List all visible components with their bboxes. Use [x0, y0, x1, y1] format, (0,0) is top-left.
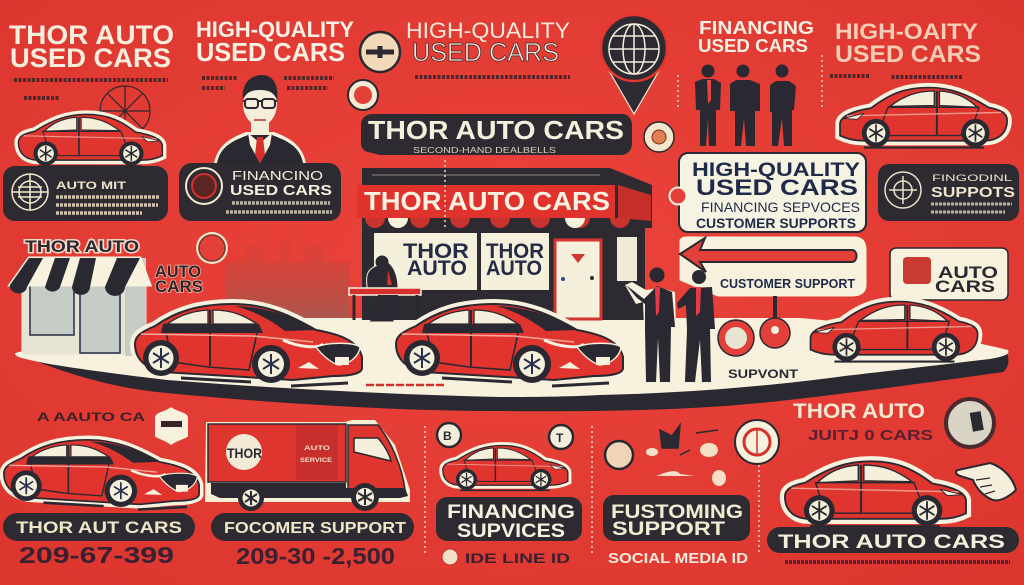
icon: pointing hand — [956, 463, 1016, 500]
icon: small badge B: B — [443, 429, 452, 443]
poster: AUTO — [304, 445, 330, 452]
man right — [677, 270, 715, 382]
decorative social icons cluster — [605, 425, 726, 486]
car: bottom right — [785, 461, 966, 526]
figure: two men shaking hands — [625, 268, 715, 382]
road — [14, 318, 1008, 411]
logo badge — [226, 434, 262, 470]
panel text — [692, 160, 860, 231]
car: bottom left — [4, 440, 199, 510]
panel heading — [931, 173, 1015, 201]
icon: small coin badge — [644, 122, 674, 152]
heading: High-Oaity Used Cars: USED CARS — [835, 41, 981, 68]
side window — [617, 237, 637, 281]
pill: Financing Supvices — [436, 497, 582, 542]
panel text: FINANCING SEPVOCES — [701, 199, 860, 215]
heading: High-Quality Used Cars outlined — [406, 18, 570, 67]
dotted separators — [425, 55, 822, 555]
storefront: Thor Auto Cars — [357, 168, 652, 320]
pill: Fustoming Support — [603, 495, 750, 541]
car: front middle center — [396, 304, 623, 386]
icon: price tag — [155, 407, 188, 445]
banner title: THOR AUTO CARS — [368, 115, 624, 145]
label: A Autoca: A AAUTO CA — [37, 410, 145, 424]
panel text: AUTO — [938, 263, 998, 282]
man 1 — [695, 64, 721, 146]
heading: Thor Auto: THOR AUTO — [793, 400, 925, 423]
panel fine print — [931, 204, 1012, 212]
panel label: CUSTOMER SUPPORT — [720, 276, 855, 291]
chassis — [211, 483, 408, 498]
man 3 — [770, 64, 796, 146]
cargo box — [208, 424, 346, 482]
target icon — [716, 318, 756, 358]
panel heading: SUPPOTS — [931, 184, 1015, 201]
store body — [362, 168, 652, 320]
panel heading — [230, 168, 332, 199]
connector and support icons — [716, 296, 790, 358]
panel text: CUSTOMER SUPPORTS — [696, 215, 856, 231]
panel fine print — [56, 197, 160, 213]
panel heading: FINGODINL — [932, 173, 1012, 183]
fine print bottom right — [785, 560, 1010, 564]
panel text: HIGH-QUALITY — [692, 160, 860, 181]
icon: clock badge — [196, 232, 228, 264]
pill: Fustoming Support: FUSTOMING — [611, 502, 743, 523]
poster — [296, 425, 338, 480]
fine print lines — [14, 76, 962, 98]
panel heading: USED CARS — [230, 182, 332, 199]
car: front middle left — [135, 304, 362, 386]
chat ring — [605, 441, 633, 469]
pill: Thor Auto Cars bottom: THOR AUTO CARS — [778, 532, 1005, 553]
man left — [625, 268, 676, 382]
icon: small badge T: T — [556, 431, 564, 445]
arrow — [680, 238, 856, 272]
panel fine print — [226, 203, 332, 212]
label: Supvont: SUPVONT — [728, 367, 799, 381]
icon: small badge T — [549, 425, 573, 449]
icon: small badge B — [437, 423, 461, 447]
car: bottom center — [443, 445, 568, 490]
store sign — [357, 185, 651, 221]
heading: Financing Used Cars: USED CARS — [698, 36, 808, 56]
shop windows — [30, 258, 146, 356]
heading: High-Quality Used Cars outlined: HIGH-QUALITY — [406, 18, 570, 43]
banner subtitle: SECOND-HAND DEALBELLS — [413, 145, 556, 155]
heading: High-Quality Used Cars — [196, 17, 354, 67]
heading: Financing Used Cars: FINANCING — [699, 18, 814, 38]
line id text: IDE LINE ID — [465, 550, 570, 566]
label: Auto Cars: CARS — [155, 277, 203, 296]
pill: Thor Auto Cars bottom — [767, 527, 1019, 553]
window 2: AUTO — [486, 257, 542, 280]
man 2 — [730, 64, 760, 146]
cream blobs — [646, 443, 726, 486]
pill: Financing Supvices: SUPVICES — [457, 521, 565, 542]
window 2: THOR — [486, 240, 544, 263]
panel: high-quality used cars — [670, 153, 866, 232]
icon: steering badge — [360, 32, 400, 72]
car side view — [18, 114, 162, 166]
window 1: AUTO — [407, 257, 467, 280]
window 1: THOR — [403, 240, 469, 263]
red marker — [670, 188, 686, 204]
label: Juitj 0 Cars: JUITJ 0 CARS — [808, 427, 933, 444]
heading: High-Quality Used Cars: USED CARS — [196, 37, 345, 67]
cab — [348, 425, 405, 490]
line icon — [442, 549, 458, 565]
car: middle right — [810, 302, 978, 362]
banner: Thor Auto Cars — [361, 114, 632, 155]
heading: High-Quality Used Cars outlined: USED CARS — [412, 37, 559, 67]
store scallops — [365, 218, 630, 228]
heading: Thor Auto Used Cars — [9, 20, 174, 73]
label: Thor Auto: THOR AUTO — [25, 237, 139, 256]
shop: left storefront with awning — [10, 258, 150, 356]
panel: customer support with arrow — [680, 237, 866, 296]
pill: Thor Aut Cars: THOR AUT CARS — [16, 518, 182, 537]
panel: left info — [3, 166, 168, 221]
scattered shapes — [660, 425, 718, 455]
icon: financing badge — [186, 168, 222, 204]
awning — [10, 258, 150, 296]
pin icon — [760, 318, 790, 348]
icon: map pin with globe — [601, 15, 667, 114]
door — [555, 240, 601, 319]
car: top left with ferris wheel — [18, 86, 162, 166]
cab window — [354, 438, 391, 461]
pill: Focomer Support: FOCOMER SUPPORT — [224, 520, 406, 537]
label: Auto Cars — [155, 262, 203, 296]
panel: supports — [878, 164, 1019, 221]
pill: Thor Aut Cars — [3, 513, 195, 541]
window 1 — [374, 233, 477, 290]
heading: Thor Auto Used Cars: THOR AUTO — [9, 20, 174, 50]
shop walls — [22, 285, 146, 355]
person: man with glasses — [214, 75, 306, 163]
panel icon — [903, 257, 931, 284]
icon: target badge — [735, 420, 779, 464]
figures: three businessmen — [695, 64, 796, 146]
heading: Thor Auto Used Cars: USED CARS — [10, 43, 171, 73]
icon: red dot badge — [348, 80, 378, 110]
store sign: THOR AUTO CARS — [364, 186, 610, 216]
heading: Financing Used Cars — [698, 18, 814, 56]
panel heading: AUTO MIT — [56, 180, 126, 192]
label: Social Media ID: SOCIAL MEDIA ID — [608, 550, 748, 567]
phone number center: 209-30 -2,500 — [236, 543, 395, 569]
heading: High-Oaity Used Cars: HIGH-OAITY — [835, 19, 978, 44]
icon: globe badge — [12, 174, 48, 210]
heading: High-Quality Used Cars: HIGH-QUALITY — [196, 17, 354, 42]
heading: High-Oaity Used Cars — [835, 19, 981, 68]
window 2 — [481, 233, 549, 290]
panel: auto cars — [890, 248, 1008, 300]
panel text — [935, 263, 998, 296]
pill: Focomer Support — [211, 513, 414, 541]
line id row — [442, 549, 570, 566]
car: top right — [840, 88, 1007, 148]
wheels — [238, 483, 379, 511]
pill: Financing Supvices: FINANCING — [447, 502, 575, 523]
panel heading: FINANCINO — [232, 168, 323, 183]
panel: financing used cars — [179, 163, 341, 221]
icon: supports badge — [885, 172, 921, 208]
figure: seated clerk at desk — [349, 256, 421, 320]
label: Auto Cars: AUTO — [155, 262, 201, 281]
icon: gauge badge — [946, 399, 994, 447]
poster: SERVICE — [300, 457, 333, 464]
red road dashes — [366, 384, 445, 386]
backdrop: faded city skyline — [225, 240, 350, 318]
truck — [205, 420, 410, 511]
panel text: USED CARS — [696, 175, 858, 200]
pill: Fustoming Support: SUPPORT — [612, 519, 725, 540]
logo badge: THOR — [227, 445, 262, 461]
panel text: CARS — [935, 277, 995, 296]
ferris wheel — [100, 86, 150, 136]
phone number left: 209-67-399 — [19, 542, 174, 568]
